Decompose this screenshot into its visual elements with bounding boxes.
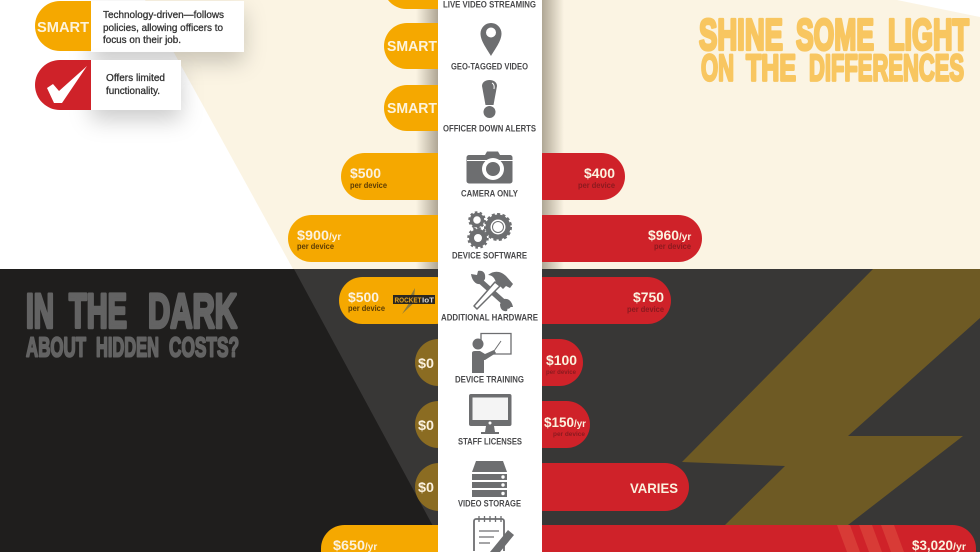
row: hardware costs: per device (627, 305, 665, 314)
label: video storage: VIDEO STORAGE (458, 498, 521, 510)
label: device software: DEVICE SOFTWARE (452, 250, 527, 262)
label: additional hardware: ADDITIONAL HARDWARE (441, 312, 538, 324)
row: storage costs (415, 463, 689, 511)
row: licenses costs (415, 401, 590, 448)
heading: shine some light: SHINE (699, 10, 783, 60)
row: camera costs: per device (578, 181, 616, 190)
row: licenses costs: per device (553, 431, 585, 438)
legend: checkmark: Offers limited (106, 73, 165, 84)
logo: RocketIoT: ROCKET (394, 296, 422, 304)
heading: shine some light (699, 10, 969, 88)
row: camera costs: $400 (584, 165, 615, 181)
row: licenses costs: /yr (574, 419, 586, 430)
row: storage costs: $0 (418, 479, 434, 495)
icon: notepad and pencil (474, 516, 514, 552)
row: reports costs (321, 525, 976, 552)
heading: in the dark (26, 286, 239, 362)
icon: trainer at board (472, 334, 511, 373)
heading: shine some light: ON (701, 48, 734, 88)
legend: smart (35, 1, 244, 52)
row: hardware costs: per device (348, 304, 386, 313)
row: software costs: per device (297, 242, 335, 251)
icon: gears (468, 212, 510, 248)
legend: checkmark: functionality. (106, 86, 160, 97)
heading: in the dark: IN (26, 286, 54, 338)
legend: smart: policies, allowing officers to (103, 23, 223, 34)
heading: in the dark: HIDDEN (96, 332, 159, 362)
row: software costs: $960 (648, 227, 679, 243)
heading: shine some light: THE (746, 48, 796, 88)
legend: smart: SMART (37, 19, 89, 36)
icon: server storage (472, 461, 507, 497)
row: software costs: $900 (297, 227, 329, 243)
icon: background lightning bolt (682, 269, 980, 525)
heading: in the dark: ABOUT (26, 332, 86, 362)
row: training costs: $0 (418, 355, 434, 371)
row: training costs (415, 339, 583, 386)
logo: RocketIoT: IoT (422, 296, 434, 304)
row: geo-tagged pill: SMART (387, 38, 437, 55)
row: hardware costs (339, 277, 671, 324)
legend: smart: focus on their job. (103, 35, 181, 46)
row: hardware costs: $750 (633, 289, 664, 305)
row: officer down pill: SMART (387, 100, 437, 117)
row: geo-tagged pill (384, 23, 464, 69)
icon: camera (466, 152, 512, 184)
label: device training: DEVICE TRAINING (455, 374, 524, 386)
heading: in the dark: THE (69, 286, 127, 338)
row: licenses costs: $150 (544, 414, 574, 430)
label: geo-tagged video: GEO-TAGGED VIDEO (451, 62, 528, 72)
row: licenses costs: $0 (418, 417, 434, 433)
row: officer down pill (384, 85, 464, 131)
heading: in the dark: DARK (148, 286, 237, 338)
row: software costs (288, 215, 702, 262)
label: staff licenses: STAFF LICENSES (458, 436, 522, 448)
row: storage costs: VARIES (630, 480, 678, 496)
icon: monitor (469, 394, 512, 434)
row: software costs: per device (654, 242, 692, 251)
legend: smart: Technology-driven—follows (103, 10, 224, 21)
row: camera costs: $500 (350, 165, 381, 181)
icon: exclamation mark (482, 80, 497, 118)
panel: light upper background (0, 0, 980, 269)
panel: dark lower background (0, 269, 980, 552)
icon: map pin (480, 23, 502, 56)
row: live video streaming pill (388, 0, 460, 9)
row: training costs: $100 (546, 352, 577, 368)
row: hardware costs: $500 (348, 289, 379, 305)
row: software costs: /yr (679, 232, 691, 243)
row: camera costs: per device (350, 181, 388, 190)
label: camera only: CAMERA ONLY (461, 188, 519, 200)
panel: centre feature column (438, 0, 542, 552)
row: software costs: /yr (329, 232, 341, 243)
heading: shine some light: SOME (796, 10, 874, 60)
heading: in the dark: COSTS? (169, 332, 239, 362)
logo: RocketIoT (393, 288, 435, 314)
legend: checkmark (35, 60, 181, 110)
icon: wrench and hammer (471, 271, 513, 311)
row: camera costs (341, 153, 625, 200)
row: training costs: per device (546, 369, 576, 376)
label: officer down alerts: OFFICER DOWN ALERTS (443, 124, 536, 134)
